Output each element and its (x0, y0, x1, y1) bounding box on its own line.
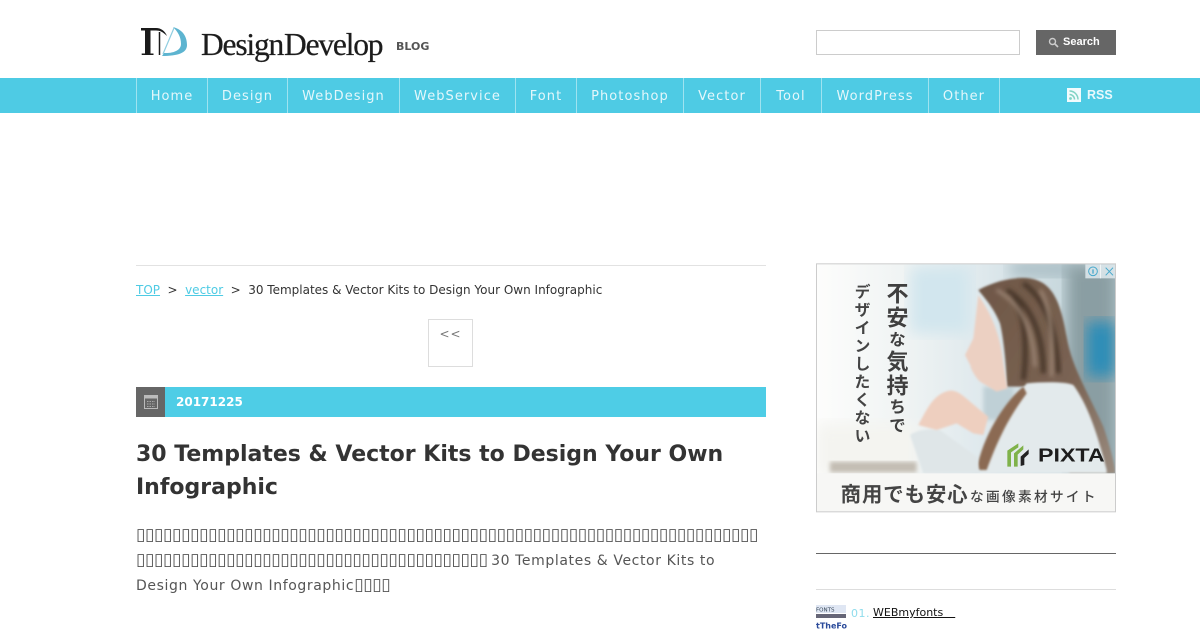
pager box (428, 319, 473, 367)
nav: WebService: WebService (414, 89, 501, 104)
ad tagline: 商用でも安心 (841, 484, 969, 507)
RSS label: RSS (1087, 88, 1113, 102)
sidebar rule light (816, 589, 1116, 590)
article intro text: Design Your Own Infographic▯▯▯▯ (136, 575, 390, 595)
header (141, 27, 1116, 62)
PIXTA wordmark: PIXTA (1038, 446, 1105, 466)
logo (141, 27, 429, 62)
date bar (136, 387, 766, 417)
icon: magnifier (1048, 38, 1058, 48)
article intro text: ▯▯▯▯▯▯▯▯▯▯▯▯▯▯▯▯▯▯▯▯▯▯▯▯▯▯▯▯▯▯▯▯▯▯▯▯▯▯▯▯▯▯▯▯▯▯▯▯▯▯▯▯▯▯▯▯▯▯▯▯▯▯▯▯▯▯▯▯▯ (136, 525, 758, 545)
nav: Home (136, 78, 207, 113)
wordmark: DesignDevelop (201, 27, 382, 62)
nav: WebDesign (287, 78, 399, 113)
nav: Font: Font (530, 89, 562, 104)
nav: Tool: Tool (776, 89, 806, 104)
ranking link: WEBmyfonts (873, 606, 943, 619)
ranking item (816, 605, 956, 630)
article title: Infographic (136, 475, 278, 500)
article intro text: ▯▯▯▯▯▯▯▯▯▯▯▯▯▯▯▯▯▯▯▯▯▯▯▯▯▯▯▯▯▯▯▯▯▯▯▯▯▯▯30 Templates & Vector Kits to (136, 550, 715, 570)
sidebar rule dark (816, 553, 1116, 554)
ad subheadline: デザインしたくない (852, 282, 870, 445)
search label: Search (1063, 36, 1100, 48)
ranking thumbnail: FONTS (816, 608, 835, 614)
icon: calendar (136, 387, 165, 417)
rank number: 01. (851, 607, 870, 620)
nav: Design (207, 78, 287, 113)
nav: Tool (760, 78, 821, 113)
nav: WebService (399, 78, 515, 113)
pager box: << (439, 327, 462, 341)
woman illustration (910, 278, 1115, 473)
nav: Photoshop: Photoshop (591, 89, 669, 104)
nav: WordPress (821, 78, 928, 113)
breadcrumb: TOP > vector > 30 Templates & Vector Kits to Design Your Own Infographic (136, 283, 602, 297)
navigation bar (0, 78, 1200, 113)
blog label: BLOG (396, 40, 429, 53)
nav: Vector: Vector (698, 89, 746, 104)
search input (816, 30, 1020, 55)
icon: PIXTA mark (1007, 443, 1023, 467)
nav: Other (928, 78, 1000, 113)
nav: Home: Home (151, 89, 193, 104)
nav: Other: Other (943, 89, 985, 104)
nav: Photoshop (576, 78, 683, 113)
top rule (136, 265, 766, 266)
icon: DD logo mark (141, 27, 187, 56)
article title: 30 Templates & Vector Kits to Design Your Own (136, 442, 723, 467)
photo background (817, 264, 1115, 474)
nav: WordPress: WordPress (836, 89, 914, 104)
search button (1036, 30, 1116, 55)
nav: Design: Design (222, 89, 273, 104)
ad tagline: な画像素材サイト (970, 490, 1098, 505)
article intro text (136, 525, 758, 595)
ad headline: 不安 な 気持 ちで (884, 282, 908, 436)
nav: Vector (683, 78, 760, 113)
PIXTA logo (1007, 443, 1105, 467)
ad banner (816, 263, 1116, 512)
ranking thumbnail (816, 605, 847, 630)
nav: WebDesign: WebDesign (302, 89, 385, 104)
bottom band (907, 473, 1115, 512)
article title (136, 442, 723, 500)
date: 20171225 (176, 395, 243, 409)
ad choices icons (1085, 264, 1115, 278)
nav: Font (515, 78, 576, 113)
icon: RSS (1067, 88, 1081, 102)
